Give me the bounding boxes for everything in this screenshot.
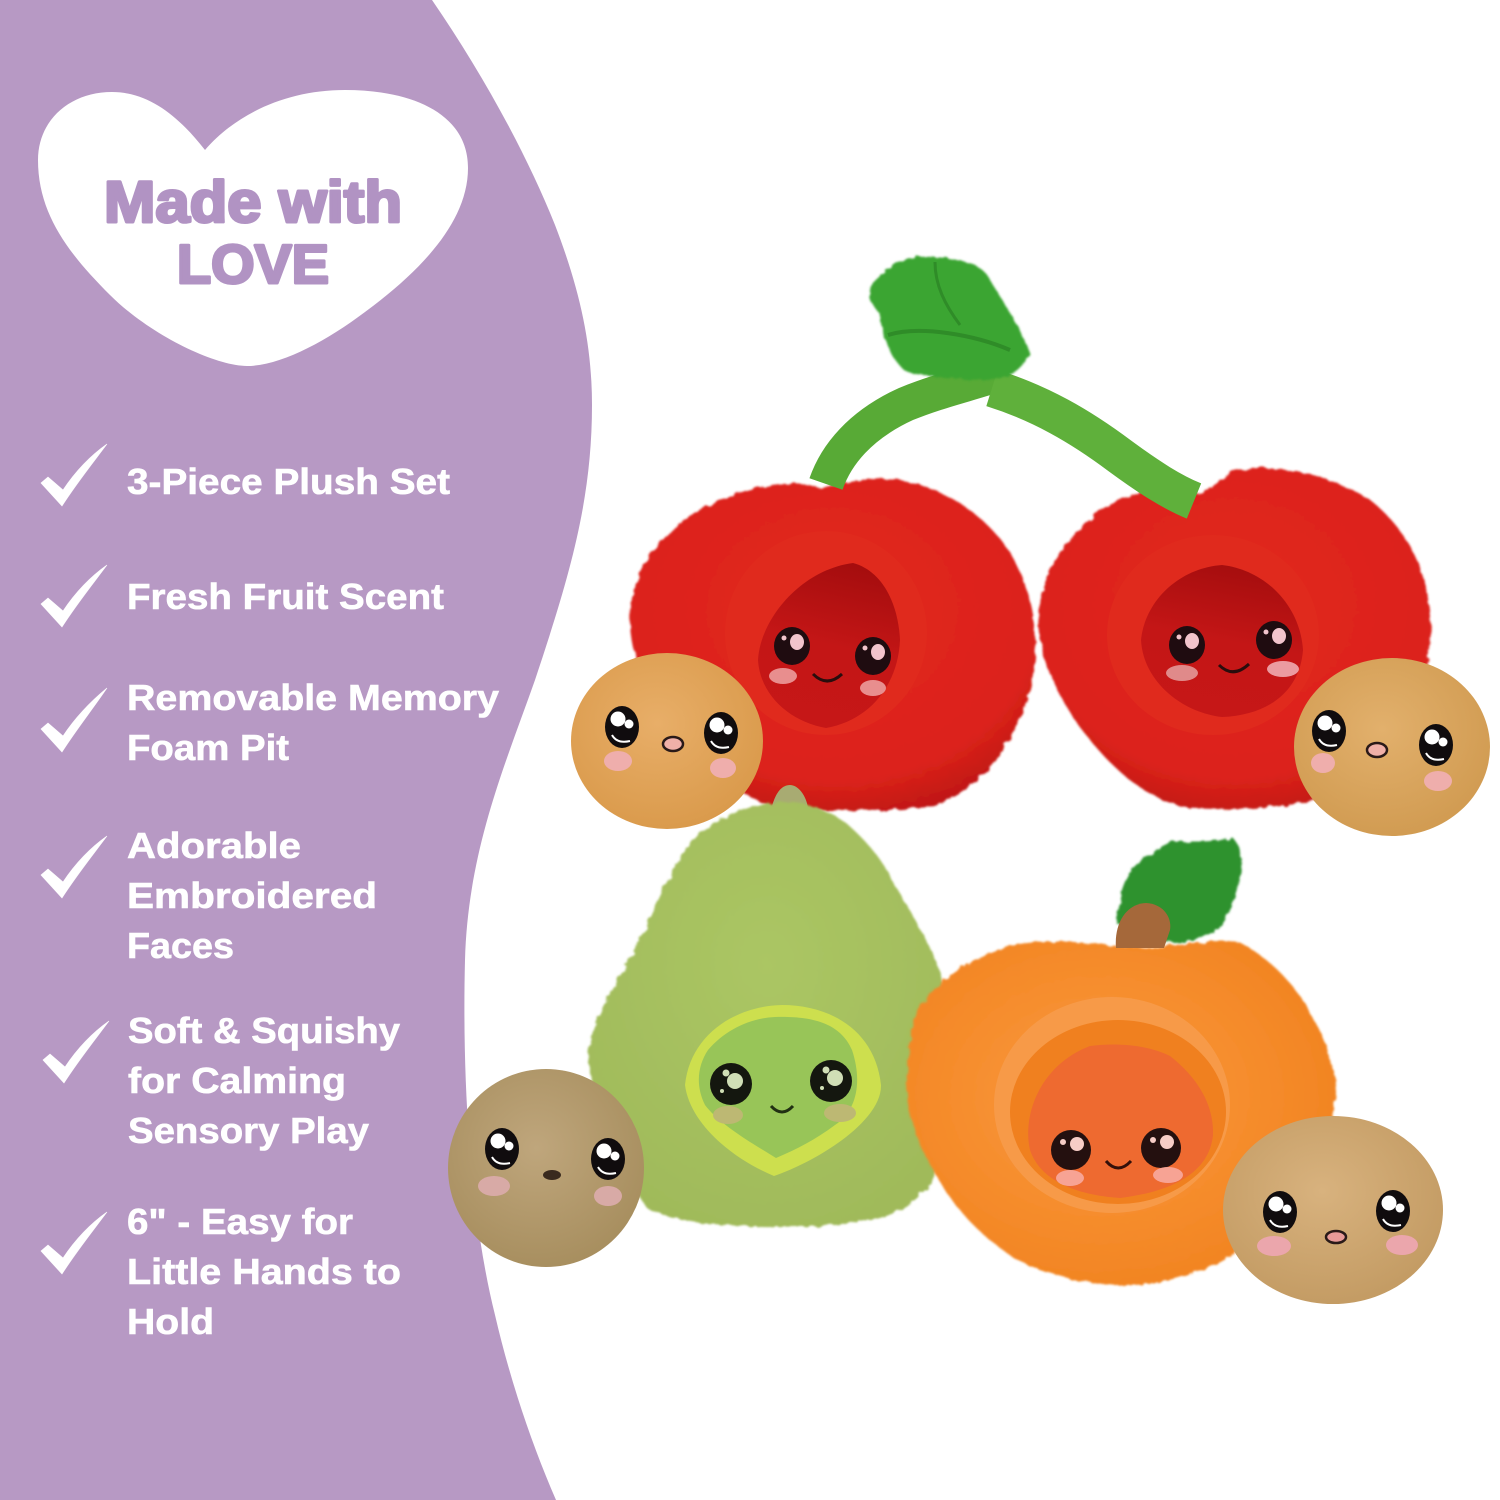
avocado hole rim — [685, 1005, 881, 1176]
feature: Removable Memory Foam Pit: Foam Pit — [127, 727, 289, 768]
plush: avocado pit — [448, 1069, 644, 1267]
feature: Removable Memory Foam Pit — [41, 677, 499, 768]
left cherry body — [630, 478, 1035, 810]
left cherry hole — [758, 563, 900, 728]
feature: 6 inch Easy for Little Hands to Hold: Hold — [127, 1301, 214, 1342]
heart shape — [38, 90, 468, 366]
feature: Adorable Embroidered Faces: Faces — [127, 925, 234, 966]
plush: peach — [907, 838, 1336, 1286]
heading: Made with: Made with — [104, 170, 402, 235]
left cherry hood rim — [712, 518, 940, 748]
feature: Fresh Fruit Scent: Fresh Fruit Scent — [127, 576, 444, 617]
avocado tip — [772, 785, 808, 808]
peach inner — [1028, 1044, 1213, 1198]
badge: heart with Made with LOVE — [38, 90, 468, 366]
heading: LOVE: LOVE — [177, 233, 329, 295]
avocado face — [710, 1060, 856, 1124]
plush: avocado — [588, 785, 945, 1227]
cherry stems — [826, 372, 1194, 501]
plush: peach pit — [1223, 1116, 1443, 1304]
plush: cherry pit left — [571, 653, 763, 829]
feature: Fresh Fruit Scent — [41, 565, 444, 627]
right cherry face — [1166, 621, 1299, 681]
feature: Adorable Embroidered Faces — [41, 825, 377, 966]
peach hole — [1010, 1020, 1226, 1204]
feature: Removable Memory Foam Pit: Removable Memory — [127, 677, 499, 718]
panel: purple wavy sidebar — [0, 0, 592, 1500]
avocado inner — [699, 1017, 857, 1158]
feature: 3-Piece Plush Set — [41, 444, 450, 506]
feature: Soft & Squishy for Calming Sensory Play: Sensory Play — [128, 1110, 369, 1151]
plush: cherry pit right — [1294, 658, 1490, 836]
peach face — [1051, 1128, 1183, 1186]
avocado body — [588, 802, 945, 1227]
feature: Soft & Squishy for Calming Sensory Play — [43, 1010, 400, 1151]
feature: 3-Piece Plush Set: 3-Piece Plush Set — [127, 461, 450, 502]
plush: cherry pair — [630, 257, 1431, 810]
peach leaf — [1116, 838, 1241, 943]
right cherry body — [1039, 468, 1431, 809]
feature: Soft & Squishy for Calming Sensory Play: for Calming — [128, 1060, 346, 1101]
peach hood rim — [994, 997, 1230, 1213]
feature: 6 inch Easy for Little Hands to Hold: 6" - Easy for — [127, 1201, 353, 1242]
peach stem — [1116, 903, 1170, 948]
right cherry hood rim — [1107, 535, 1319, 735]
left cherry face — [769, 627, 891, 696]
feature: 6 inch Easy for Little Hands to Hold: Little Hands to — [127, 1251, 401, 1292]
feature: Soft & Squishy for Calming Sensory Play: Soft & Squishy — [128, 1010, 400, 1051]
feature list — [41, 444, 499, 1342]
feature: 6 inch Easy for Little Hands to Hold — [41, 1201, 401, 1342]
feature: Adorable Embroidered Faces: Embroidered — [127, 875, 377, 916]
cherry leaf knot — [869, 257, 1030, 380]
feature: Adorable Embroidered Faces: Adorable — [127, 825, 301, 866]
right cherry hole — [1141, 565, 1303, 717]
peach body — [907, 941, 1336, 1286]
